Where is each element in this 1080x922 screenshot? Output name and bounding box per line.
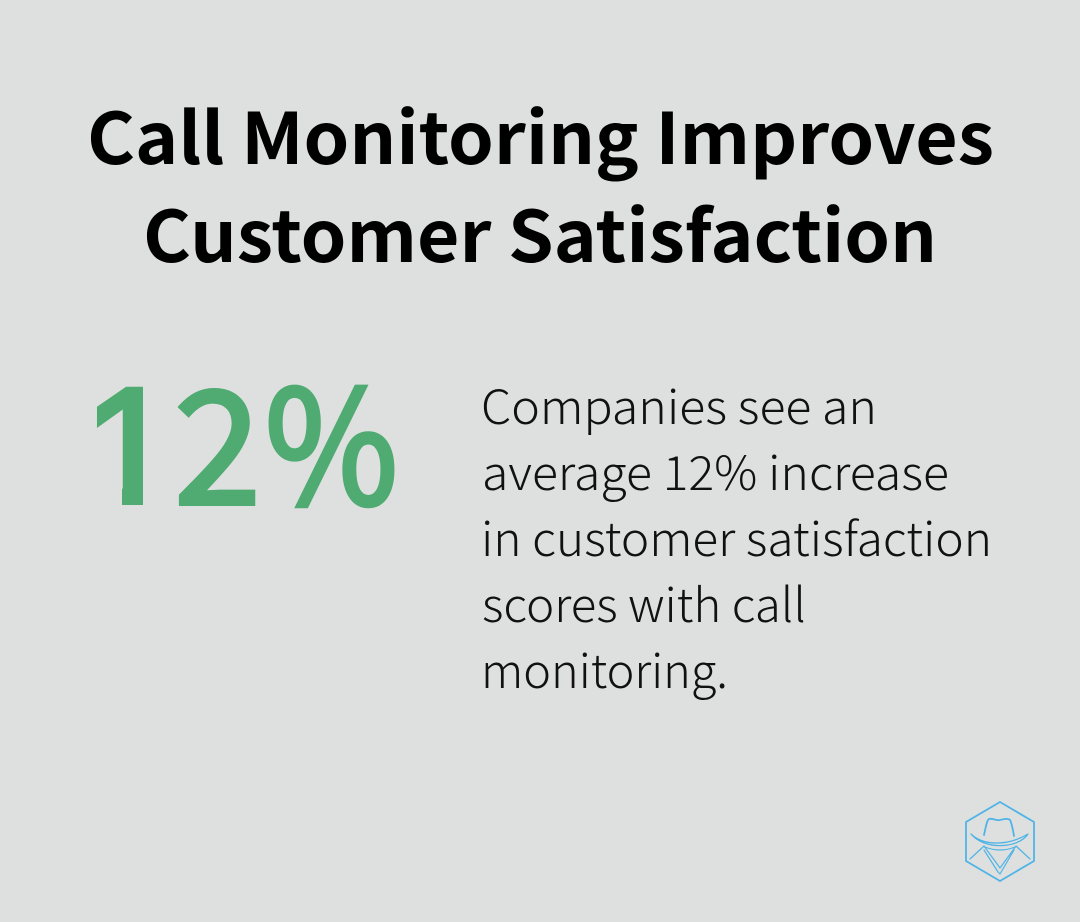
big stat: 12% — [96, 384, 394, 508]
description text: Companies see an — [481, 369, 877, 438]
description text: scores with call — [482, 567, 806, 636]
infographic canvas — [90, 106, 1035, 882]
description text — [481, 369, 992, 702]
title — [87, 83, 994, 283]
big stat: 12%: % — [265, 323, 398, 550]
title: Customer Satisfaction — [143, 181, 937, 283]
description text: in customer satisfaction — [481, 501, 992, 570]
description text: monitoring. — [481, 633, 728, 702]
title: Call Monitoring Improves — [87, 83, 994, 185]
big stat: 12%: 2 — [174, 323, 261, 550]
big stat: 12%: 1 — [84, 355, 176, 540]
icon: spy logo in hexagon — [966, 802, 1034, 881]
description text: average 12% increase — [482, 435, 949, 504]
